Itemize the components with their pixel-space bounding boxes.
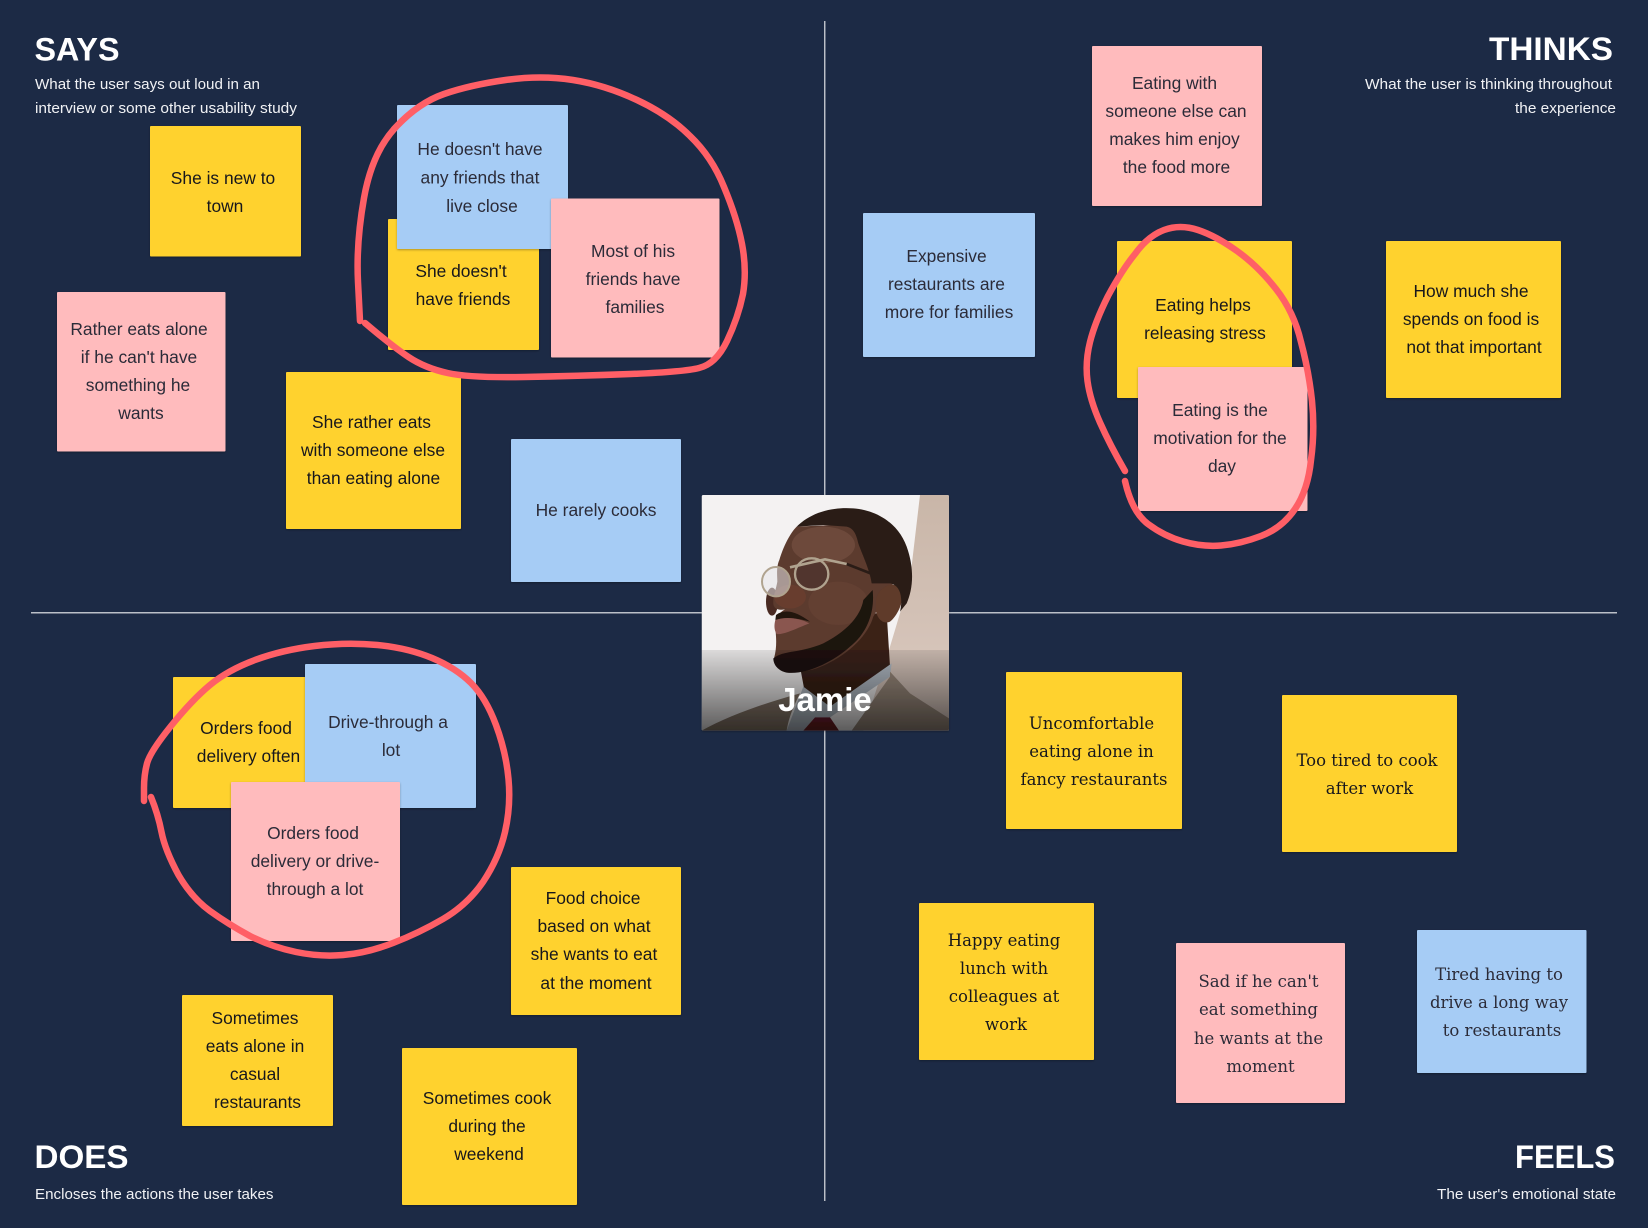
sticky: Uncomfortable eating alone: eating alone in [1029, 742, 1154, 761]
sticky: Sometimes eats alone: casual [230, 1064, 280, 1084]
sticky: He rarely cooks [511, 439, 681, 582]
sticky: How much she spends: spends on food is [1403, 309, 1539, 329]
sticky: Happy eating lunch: work [985, 1015, 1028, 1034]
red circle: thinks cluster [1087, 227, 1313, 546]
sticky: Most of his friends have families [551, 198, 720, 358]
sticky: Too tired to cook: Too tired to cook [1296, 751, 1439, 770]
sticky: Orders food delivery often: delivery often [197, 746, 300, 766]
sticky: Sometimes cook: weekend [453, 1144, 524, 1164]
sticky: She rather eats with someone: with someone else [300, 440, 445, 460]
sticky: Too tired to cook: after work [1326, 779, 1414, 798]
sticky: She doesn't have friends: She doesn't [415, 261, 507, 281]
sticky: She doesn't have friends: have friends [416, 289, 511, 309]
sticky: Happy eating lunch: lunch with [960, 959, 1049, 978]
sticky: Rather eats alone: something he [86, 375, 190, 395]
sticky: Eating with someone else: makes him enjoy [1109, 129, 1240, 149]
sticky: Rather eats alone: wants [117, 403, 164, 423]
sticky: Food choice: she wants to eat [531, 944, 657, 964]
sticky: Eating is the motivation: day [1208, 456, 1236, 476]
sticky: Food choice [511, 867, 681, 1015]
sticky: She rather eats with someone: than eating alone [307, 468, 440, 488]
sticky: Orders food delivery or drive-through: through a lot [267, 879, 364, 899]
sticky: Tired having to drive [1417, 930, 1586, 1073]
persona photo: Jamie [702, 495, 949, 731]
sticky: Drive-through a lot: lot [382, 740, 400, 760]
heading: says: What the user says out loud in an [35, 76, 260, 93]
sticky: Rather eats alone: Rather eats alone [70, 319, 208, 339]
sticky: Eating is the motivation: motivation for the [1153, 428, 1287, 448]
sticky: Food choice: at the moment [540, 973, 652, 993]
sticky: Orders food delivery or drive-through: Orders food [267, 823, 359, 843]
sticky: She rather eats with someone [286, 372, 461, 529]
sticky: Eating is the motivation: Eating is the [1172, 400, 1268, 420]
heading: feels: FEELS [1515, 1139, 1615, 1175]
sticky: How much she spends: How much she [1413, 281, 1529, 301]
sticky: Rather eats alone: if he can't have [81, 347, 197, 367]
red circle: says cluster [358, 78, 745, 377]
sticky: Expensive restaurants: Expensive [906, 246, 987, 266]
sticky: He doesn't have any friends: live close [446, 196, 518, 216]
sticky: Drive-through a lot: Drive-through a [328, 712, 448, 732]
sticky: He rarely cooks: He rarely cooks [536, 500, 657, 520]
sticky: Drive-through a lot [305, 664, 476, 808]
sticky: Sometimes eats alone [182, 995, 333, 1126]
sticky: She is new to town: She is new to [171, 168, 275, 188]
heading: thinks: the experience [1515, 100, 1616, 117]
sticky: Too tired to cook [1282, 695, 1457, 852]
sticky: She rather eats with someone: She rather eats [312, 412, 431, 432]
sticky: She doesn't have friends [388, 219, 539, 350]
sticky: He doesn't have any friends [397, 105, 568, 249]
sticky: Eating is the motivation [1138, 367, 1308, 511]
heading: feels: The user's emotional state [1437, 1186, 1616, 1203]
sticky: Eating helps releasing stress: releasing stress [1144, 323, 1266, 343]
sticky: Tired having to drive: drive a long way [1430, 993, 1569, 1012]
sticky: Sad if he can't eat: eat something [1199, 1000, 1318, 1019]
sticky: Most of his friends have families: Most of his [591, 241, 675, 261]
heading: does [34, 1139, 274, 1203]
sticky: Happy eating lunch: colleagues at [949, 987, 1060, 1006]
sticky: Food choice: based on what [537, 916, 651, 936]
heading: feels [1437, 1139, 1616, 1203]
sticky: Expensive restaurants [863, 213, 1035, 357]
sticky: Orders food delivery often [173, 677, 324, 808]
sticky: How much she spends [1386, 241, 1561, 398]
sticky: He doesn't have any friends: He doesn't have [417, 139, 543, 159]
sticky: Eating with someone else: someone else can [1105, 101, 1247, 121]
sticky: Sometimes eats alone: restaurants [214, 1092, 301, 1112]
sticky: Eating helps releasing stress: Eating helps [1155, 295, 1251, 315]
sticky: She is new to town: town [207, 196, 243, 216]
heading: thinks [1365, 31, 1616, 117]
heading: does: Encloses the actions the user takes [35, 1186, 274, 1203]
sticky: Eating with someone else [1092, 46, 1262, 206]
sticky: Rather eats alone [57, 292, 226, 452]
sticky: Most of his friends have families: families [606, 297, 665, 317]
sticky: She is new to town [150, 126, 301, 256]
heading: thinks: THINKS [1489, 31, 1613, 67]
sticky: Eating with someone else: the food more [1123, 157, 1230, 177]
sticky: Sad if he can't eat: he wants at the [1194, 1029, 1323, 1048]
sticky: Sometimes cook: Sometimes cook [423, 1088, 552, 1108]
sticky: Eating helps releasing stress [1117, 241, 1292, 398]
red circle: does cluster [144, 644, 509, 956]
sticky: He doesn't have any friends: any friends that [421, 168, 540, 188]
sticky: Sad if he can't eat [1176, 943, 1345, 1103]
sticky: Orders food delivery often: Orders food [200, 718, 292, 738]
sticky: Uncomfortable eating alone: Uncomfortable [1029, 714, 1154, 733]
sticky: Uncomfortable eating alone: fancy restaurants [1020, 770, 1168, 789]
sticky: Orders food delivery or drive-through: delivery or drive- [251, 851, 379, 871]
heading: says: SAYS [34, 32, 119, 68]
sticky: Sometimes cook: during the [448, 1116, 526, 1136]
sticky: Expensive restaurants: more for families [885, 302, 1014, 322]
sticky: Sometimes cook [402, 1048, 577, 1205]
sticky: Sad if he can't eat: moment [1226, 1057, 1295, 1076]
sticky: Food choice: Food choice [546, 888, 640, 908]
sticky: Eating with someone else: Eating with [1132, 73, 1217, 93]
sticky: Tired having to drive: Tired having to [1435, 965, 1563, 984]
sticky: How much she spends: not that important [1406, 337, 1542, 357]
heading: says [34, 32, 298, 117]
heading: says: interview or some other usability study [35, 100, 298, 117]
sticky: Orders food delivery or drive-through [231, 782, 400, 941]
persona name: Jamie [778, 681, 872, 718]
sticky: Happy eating lunch [919, 903, 1094, 1060]
sticky: Sometimes eats alone: Sometimes [212, 1008, 299, 1028]
sticky: Sad if he can't eat: Sad if he can't [1198, 972, 1319, 991]
sticky: Sometimes eats alone: eats alone in [206, 1036, 304, 1056]
heading: thinks: What the user is thinking throughout [1365, 76, 1613, 93]
sticky: Most of his friends have families: friends have [586, 269, 680, 289]
sticky: Tired having to drive: to restaurants [1443, 1021, 1561, 1040]
sticky: Uncomfortable eating alone [1006, 672, 1182, 829]
sticky: Happy eating lunch: Happy eating [948, 931, 1061, 950]
sticky: Expensive restaurants: restaurants are [888, 274, 1005, 294]
heading: does: DOES [34, 1139, 128, 1175]
